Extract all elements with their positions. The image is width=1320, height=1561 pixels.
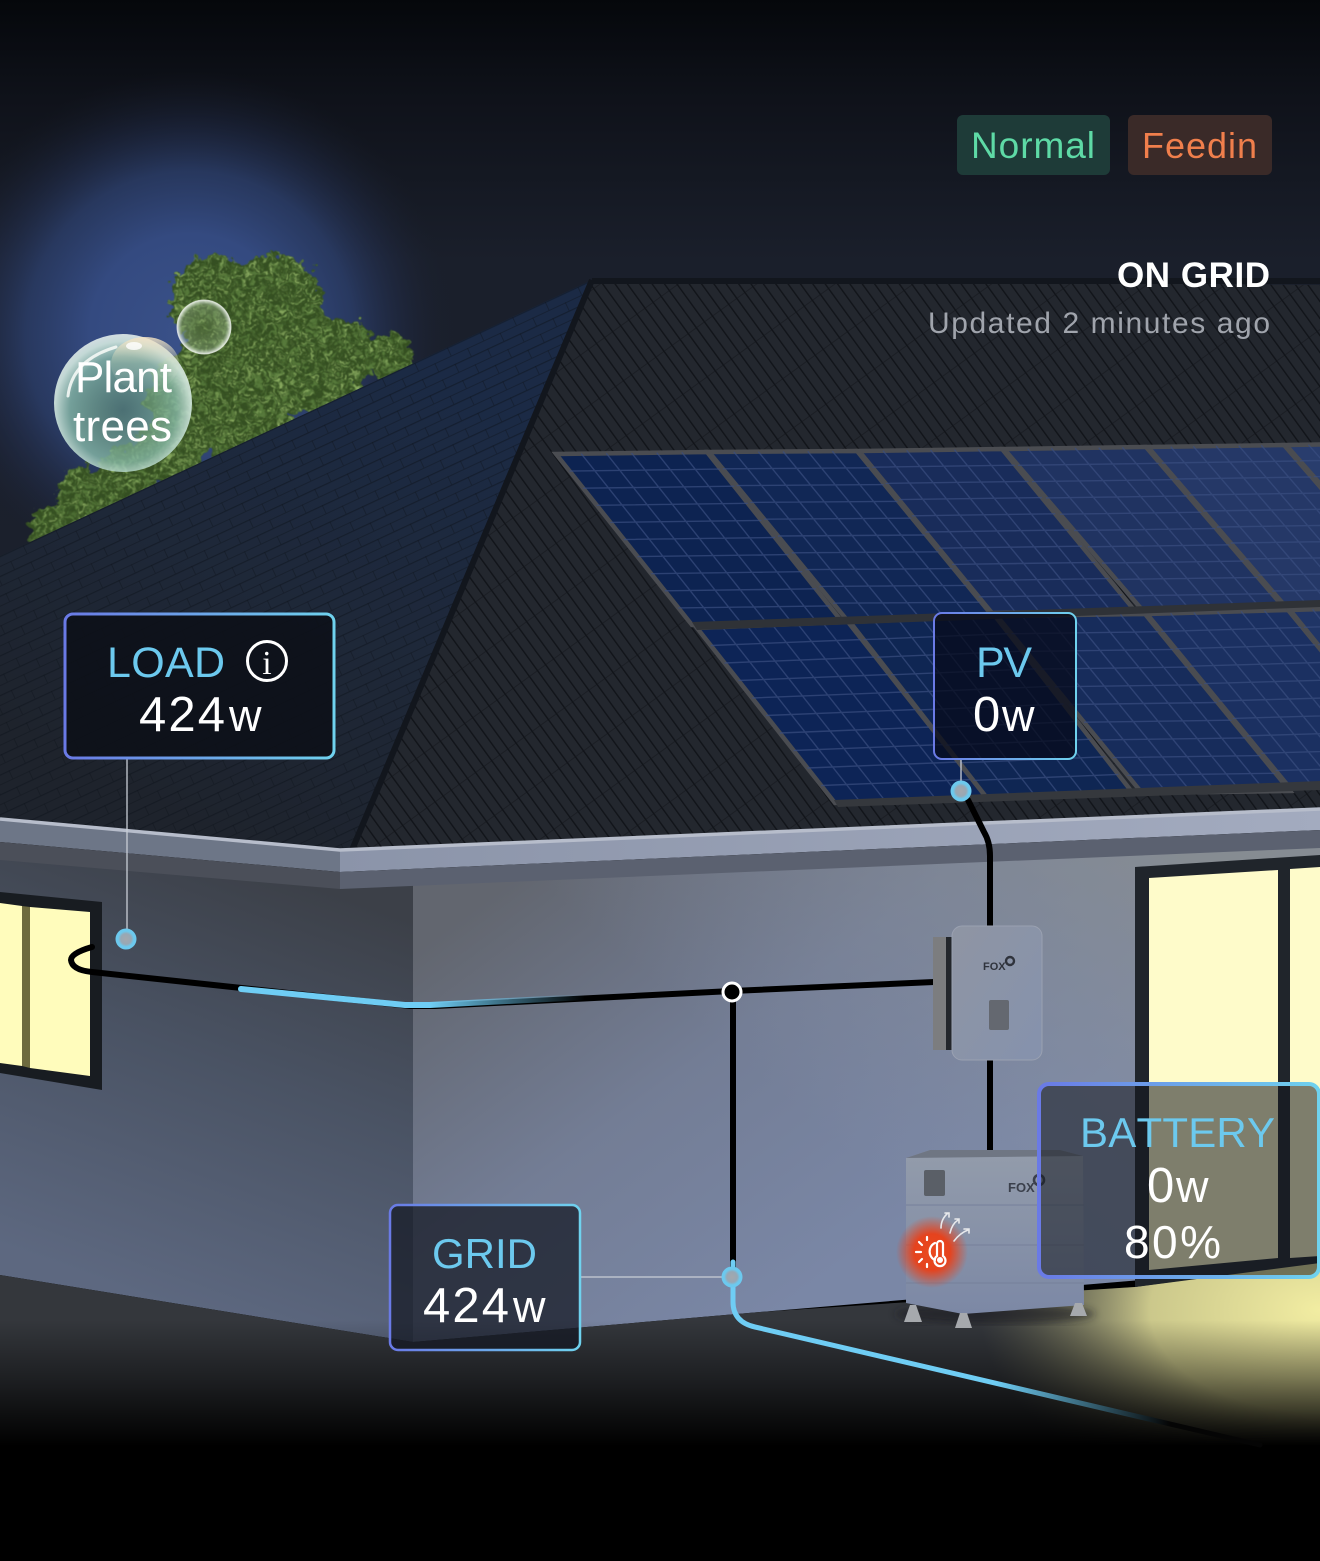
status chip: Normal [957,115,1110,175]
left window [0,892,102,1090]
moonlit blue glow [0,60,470,600]
plant trees bubble: Plant [75,353,172,402]
panel: LOAD: LOAD [107,639,225,687]
inverter: FOX [983,961,1006,973]
panel: BATTERY: 80% [1124,1216,1221,1268]
panel: GRID: GRID [432,1230,537,1277]
solar panels [556,443,1320,807]
panel: GRID: 424 [423,1279,509,1333]
small bubble [176,300,232,354]
bottom black band [0,1445,1320,1561]
icon: info [248,642,286,682]
battery unit: FOX [1008,1180,1035,1195]
junction node [723,983,741,1001]
panel: PV: 0 [973,688,1000,742]
panel: LOAD: w [228,690,262,741]
panel: GRID: w [512,1281,546,1332]
connection dots [116,780,972,1288]
battery unit [895,1150,1095,1328]
roof: main slope with shingles [350,280,1320,852]
last updated: Updated 2 minutes ago [928,307,1270,340]
panel: PV [934,613,1076,759]
icon: battery overheat warning [896,1213,969,1288]
roof fascia [0,808,1320,889]
panel: LOAD [65,614,334,758]
status chip: Feedin [1128,115,1272,175]
plant trees bubble [54,334,192,472]
tree behind roof [30,255,414,545]
roof hip ridge [352,280,1320,850]
grid status: ON GRID [1117,256,1270,295]
lit floor glow [900,1262,1320,1450]
panel: BATTERY: 0 [1147,1159,1174,1213]
status chip: Normal: Normal [971,125,1095,166]
active grid cable [733,1262,1260,1445]
active load cable [241,989,585,1005]
cables [71,800,990,1270]
roof: left hip [0,280,592,852]
panel: BATTERY: w [1175,1161,1209,1212]
icon: info: i [262,645,272,682]
connector lines [127,759,961,1277]
panel: LOAD: 424 [139,688,225,742]
sky background [0,0,1320,620]
left wall [0,850,413,1342]
status chip: Feedin: Feedin [1142,125,1257,166]
inverter [933,926,1042,1060]
ground [0,1262,1320,1561]
panel: BATTERY [1039,1084,1319,1277]
panel: BATTERY: BATTERY [1080,1109,1275,1156]
panel: PV: PV [976,639,1032,687]
ground fade to black [0,1320,1320,1446]
right door [1135,855,1320,1287]
plant trees bubble: trees [73,402,172,451]
right wall [413,835,1320,1342]
panel: PV: w [1001,690,1035,741]
panel: GRID [390,1205,580,1350]
